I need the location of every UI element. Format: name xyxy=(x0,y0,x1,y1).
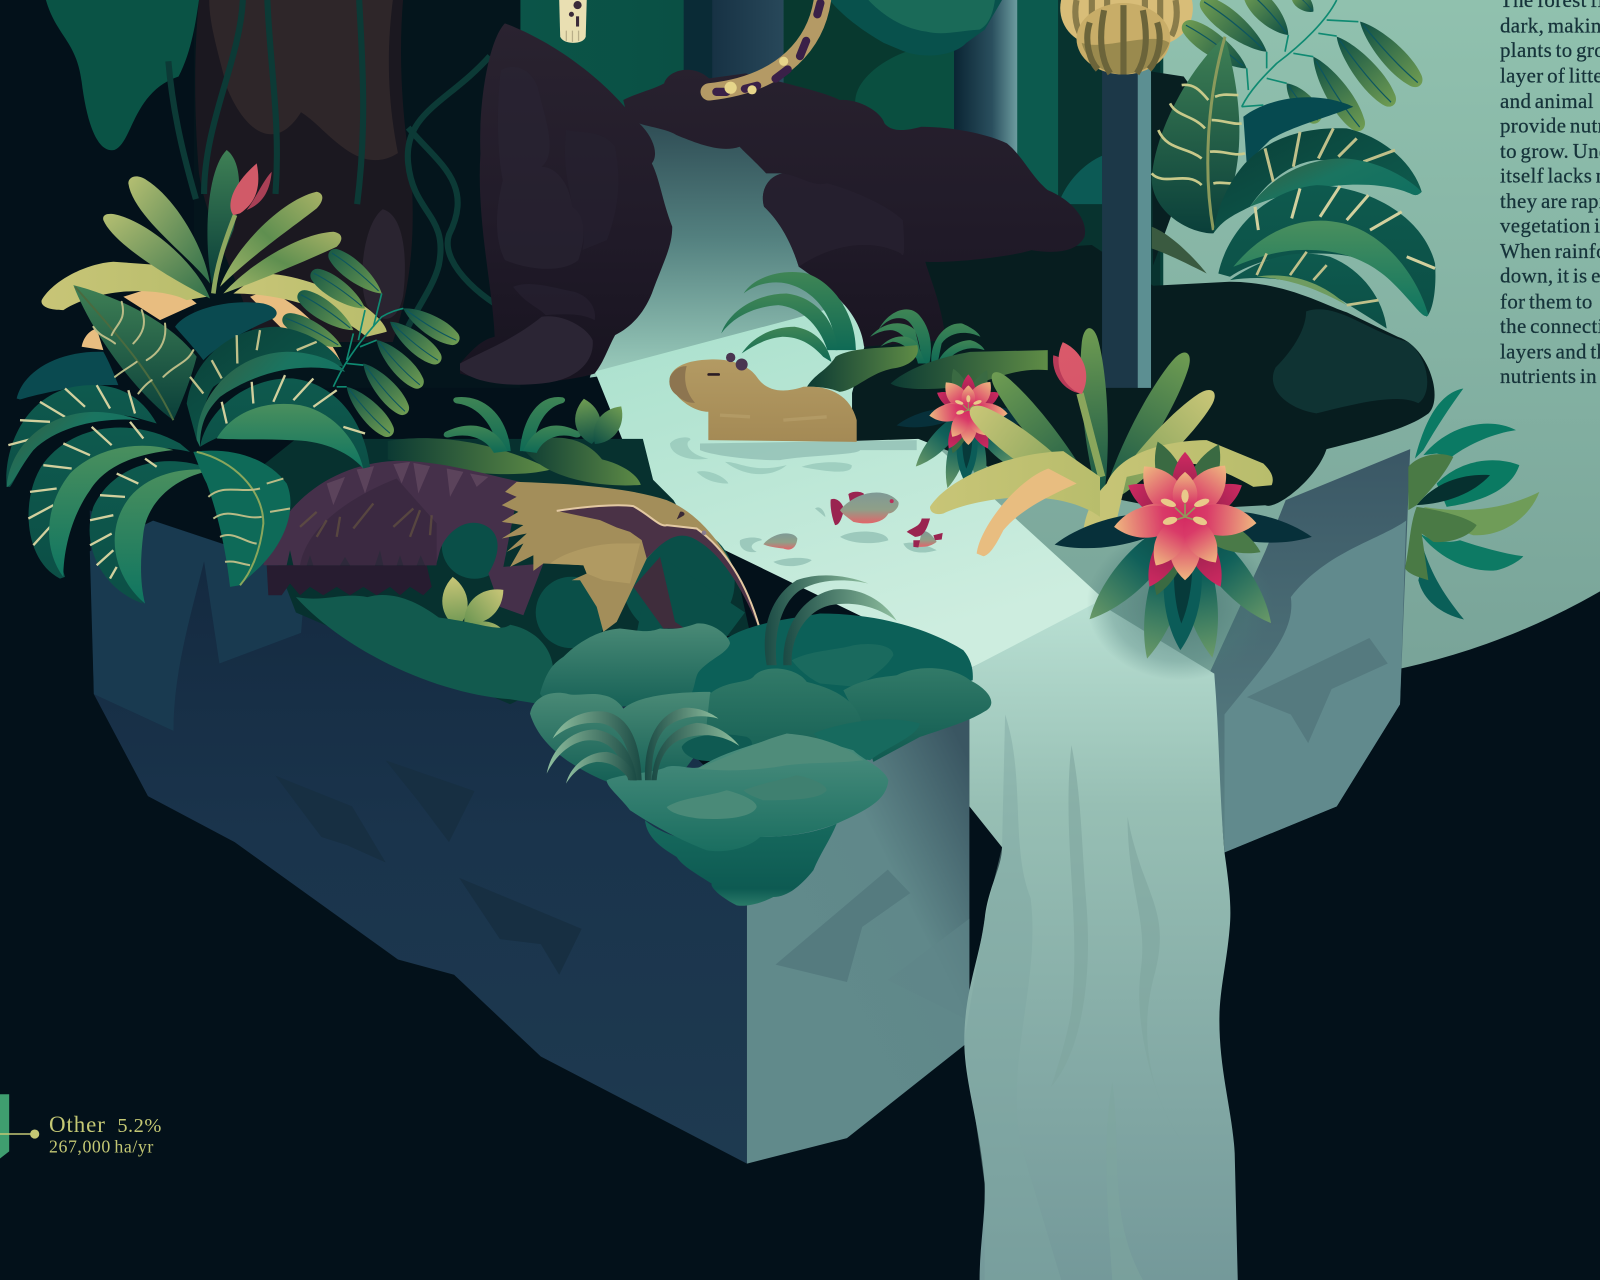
hanging striped fruit xyxy=(1060,0,1193,75)
jaguar paw xyxy=(559,0,587,43)
dark understory behind anteater xyxy=(245,439,750,704)
plant at right edge xyxy=(1405,388,1539,620)
giant anteater xyxy=(263,461,761,632)
hanging green foliage top left xyxy=(46,0,199,150)
forest text column: and animal xyxy=(1500,89,1594,113)
jaguar tail xyxy=(709,0,822,94)
large pink flower xyxy=(1052,437,1314,680)
leaves in front of anteater xyxy=(440,576,516,654)
fern on cliff top xyxy=(765,575,897,665)
fern on river bank xyxy=(444,397,581,453)
island left rock face xyxy=(90,510,755,1164)
dark bank behind capybara xyxy=(852,245,1435,510)
small pink flower xyxy=(895,366,1039,490)
rock mass left of cave xyxy=(460,23,672,385)
piranhas xyxy=(740,492,943,566)
dark tree trunks top left xyxy=(194,0,520,388)
island right rock face xyxy=(1209,449,1410,852)
bush under anteater left xyxy=(296,595,553,704)
forest text column xyxy=(1500,0,1600,388)
rock arch over cave xyxy=(623,70,1085,347)
green backing for anteater arch xyxy=(442,513,745,653)
main waterfall xyxy=(964,602,1238,1280)
lighter foliage patch on dark bank xyxy=(1273,309,1427,413)
yellow plant top left xyxy=(41,150,387,360)
chart label: Other xyxy=(0,1094,162,1159)
chart label: Other: 5.2% xyxy=(117,1115,162,1137)
fern in front of bush xyxy=(547,708,739,784)
big frond cluster left xyxy=(6,285,370,604)
mossy mound centre xyxy=(807,345,918,392)
olive plant centre right xyxy=(930,327,1273,556)
pond fern back xyxy=(721,272,856,362)
chart label: Other: Other xyxy=(49,1112,106,1137)
fronds of right plant xyxy=(1152,0,1435,328)
river surface xyxy=(595,302,1107,669)
chart label: Other: 267,000 ha/yr xyxy=(49,1136,154,1156)
mossy mound right xyxy=(891,350,1048,389)
small green leaves on bank xyxy=(571,397,631,451)
lianas xyxy=(168,0,520,327)
front bushes xyxy=(530,614,991,906)
mossy mound centre left xyxy=(520,438,641,485)
small leafy branch xyxy=(278,243,464,442)
pale moon circle backdrop xyxy=(548,0,1600,685)
capybara xyxy=(669,353,917,484)
island centre rock face xyxy=(747,715,969,1164)
cave waterfall xyxy=(590,122,878,378)
forest backdrop columns xyxy=(510,0,1209,337)
pond fern right xyxy=(870,309,984,363)
forest text column: nutrients in xyxy=(1500,364,1597,388)
mossy mound left xyxy=(388,438,551,474)
forest text column: for them to xyxy=(1500,289,1593,313)
trunk behind right plant xyxy=(1102,61,1151,388)
